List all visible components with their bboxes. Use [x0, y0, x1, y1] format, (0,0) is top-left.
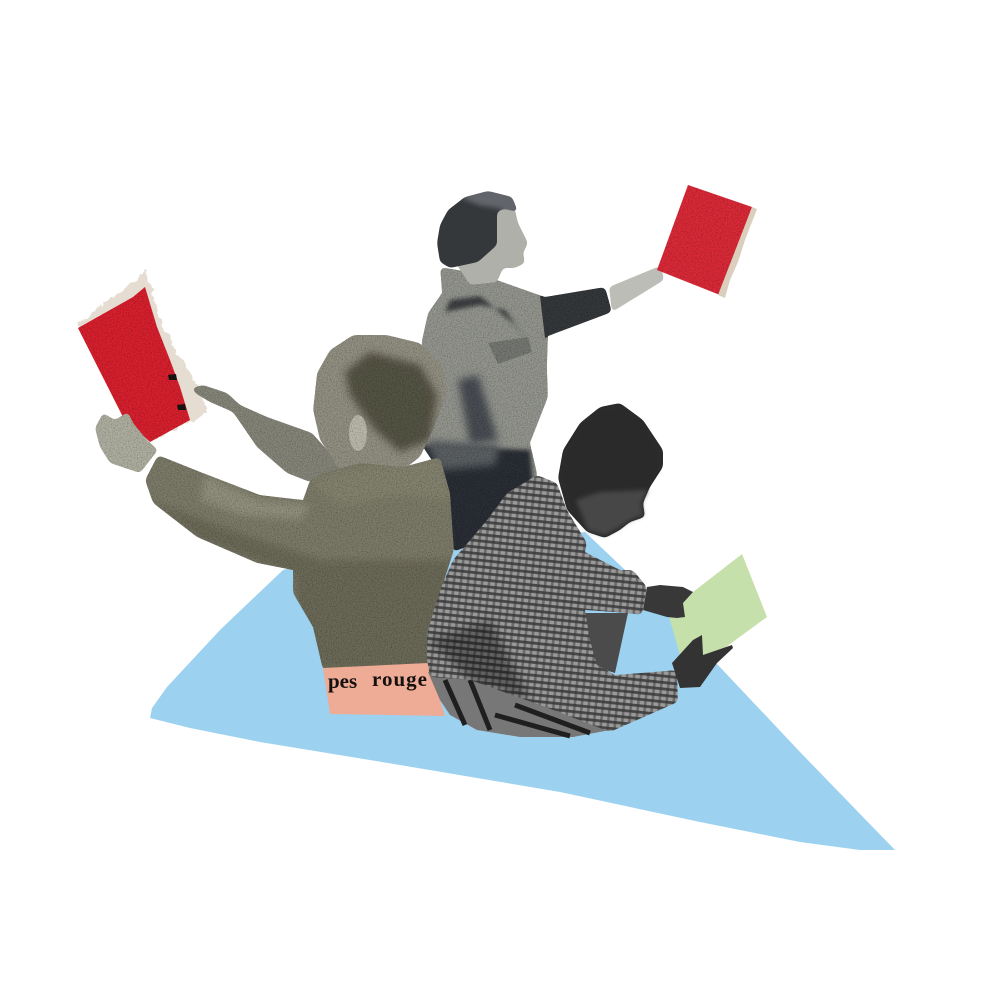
standing figure with raised red book	[410, 185, 757, 560]
trousers stripes	[428, 672, 610, 737]
upper hand	[643, 585, 693, 618]
boy jersey	[140, 450, 460, 675]
lighter hair top	[462, 191, 518, 212]
green paper	[668, 554, 767, 655]
torn black marks	[168, 374, 186, 410]
word fragment: rouge: rouge	[372, 667, 428, 691]
shirt shadow	[430, 620, 530, 700]
blue paper triangle	[150, 532, 895, 850]
boy far arm and hand	[192, 385, 345, 482]
pink text strip	[323, 663, 445, 716]
collage illustration	[78, 185, 895, 850]
red book, upper right	[657, 185, 752, 295]
red book, left	[78, 287, 190, 442]
word fragment: pes: pes	[328, 669, 357, 693]
standing figure head	[455, 195, 528, 285]
boy near hand	[95, 412, 158, 473]
reader face	[576, 490, 648, 535]
stripe lines	[445, 680, 590, 736]
torn paper behind book	[77, 270, 208, 442]
left boy with raised red book	[77, 270, 460, 716]
standing figure hair	[437, 191, 518, 268]
standing figure body	[422, 268, 611, 550]
standing figure forearm and hand	[609, 266, 664, 312]
checked shirt	[427, 476, 678, 732]
lower hand	[672, 635, 733, 688]
boy head	[313, 335, 446, 468]
knee stripes	[583, 613, 628, 673]
torn edge, upper book	[718, 207, 757, 298]
reader head	[558, 403, 663, 538]
seated reader in checked shirt	[420, 403, 767, 740]
